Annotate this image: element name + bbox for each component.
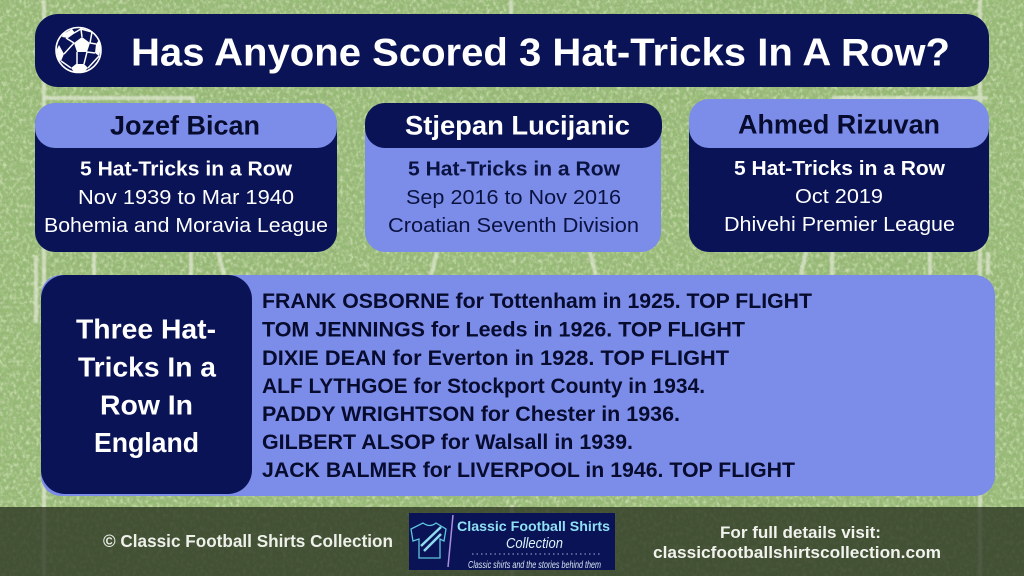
panel heading	[76, 314, 216, 458]
website call to action: classicfootballshirtscollection.com	[653, 543, 941, 562]
panel heading: England	[94, 427, 199, 458]
panel: Three Hat-Tricks In a Row In England	[41, 275, 995, 496]
details: 5 Hat-Tricks in a Row	[408, 158, 620, 180]
website call to action: For full details visit:	[720, 523, 881, 542]
logo: Collection	[506, 535, 563, 552]
details: Bohemia and Moravia League	[44, 215, 328, 237]
details: Oct 2019	[795, 186, 883, 208]
details: Sep 2016 to Nov 2016	[406, 187, 621, 209]
title banner	[35, 14, 989, 87]
logo: Classic shirts and the stories behind them	[468, 560, 601, 571]
details: Croatian Seventh Division	[388, 215, 639, 237]
list of players: ALF LYTHGOE for Stockport County in 1934.	[262, 375, 705, 398]
logo	[409, 513, 615, 571]
details: Dhivehi Premier League	[724, 214, 955, 236]
list of players: PADDY WRIGHTSON for Chester in 1936.	[262, 403, 680, 426]
list of players: GILBERT ALSOP for Walsall in 1939.	[262, 431, 633, 454]
panel: Jozef Bican	[35, 103, 337, 252]
list of players: JACK BALMER for LIVERPOOL in 1946. TOP FLIGHT	[262, 459, 795, 482]
panel heading: Row In	[100, 390, 193, 420]
list of players: DIXIE DEAN for Everton in 1928. TOP FLIGHT	[262, 347, 729, 370]
details	[388, 158, 639, 237]
panel: Ahmed Rizuvan	[689, 99, 989, 252]
panel heading: Tricks In a	[78, 352, 216, 382]
list of players: FRANK OSBORNE for Tottenham in 1925. TOP FLIGHT	[262, 290, 812, 313]
list of players: TOM JENNINGS for Leeds in 1926. TOP FLIGHT	[262, 318, 745, 342]
details: 5 Hat-Tricks in a Row	[734, 158, 945, 180]
details: Nov 1939 to Mar 1940	[78, 187, 294, 209]
list of players	[262, 290, 812, 482]
panel: Stjepan Lucijanic	[365, 103, 662, 252]
name heading: Ahmed Rizuvan	[738, 110, 940, 140]
website call to action	[653, 523, 941, 562]
logo: Classic Football Shirts	[457, 518, 610, 534]
name heading: Stjepan Lucijanic	[405, 110, 630, 140]
icon: football	[56, 28, 101, 72]
details	[724, 158, 955, 236]
icon: shirt	[411, 523, 446, 558]
panel heading: Three Hat-	[76, 314, 216, 344]
copyright: © Classic Football Shirts Collection	[103, 531, 393, 551]
title text: Has Anyone Scored 3 Hat-Tricks In A Row?	[131, 32, 950, 74]
name heading: Jozef Bican	[110, 110, 260, 140]
details: 5 Hat-Tricks in a Row	[80, 158, 292, 180]
footer band	[0, 507, 1024, 576]
details	[44, 158, 328, 237]
